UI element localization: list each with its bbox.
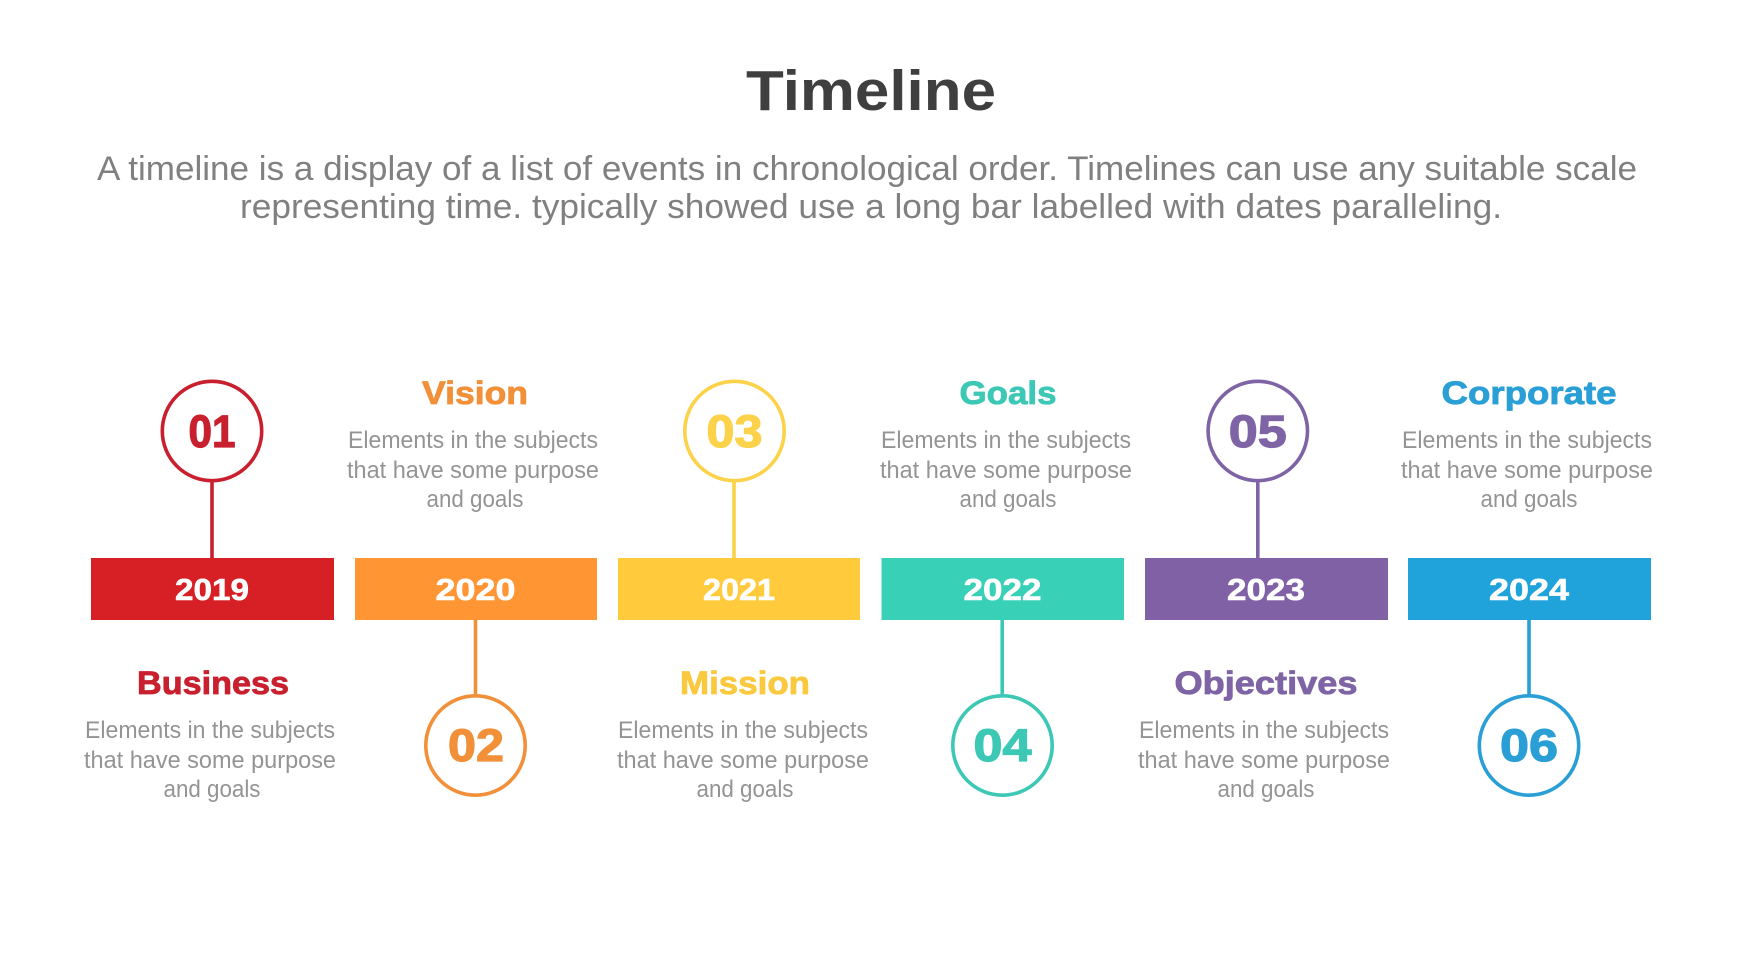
description 5: and goals bbox=[1218, 776, 1314, 803]
circle 06: 06 bbox=[1500, 720, 1558, 771]
title: Timeline bbox=[746, 59, 996, 123]
description 1: Elements in the subjects bbox=[85, 717, 335, 744]
description 4: and goals bbox=[960, 486, 1056, 513]
description 4 bbox=[880, 427, 1132, 513]
circle 05: 05 bbox=[1229, 406, 1287, 457]
heading Goals: Goals bbox=[960, 375, 1056, 411]
description 5 bbox=[1138, 717, 1390, 803]
description 2: that have some purpose bbox=[347, 457, 599, 484]
year bar 2022 bbox=[882, 558, 1124, 620]
description 6: and goals bbox=[1480, 486, 1578, 513]
description 6 bbox=[1401, 427, 1653, 513]
description 4: that have some purpose bbox=[880, 457, 1132, 484]
description 3: that have some purpose bbox=[617, 747, 869, 774]
description 1: that have some purpose bbox=[84, 747, 336, 774]
step 5: Objectives 2023 bbox=[1138, 381, 1390, 803]
year bar 2024 bbox=[1408, 558, 1651, 620]
year bar 2019 bbox=[91, 558, 334, 620]
year bar 2023: 2023 bbox=[1227, 572, 1305, 607]
circle 02 bbox=[426, 696, 525, 795]
year bar 2020 bbox=[355, 558, 597, 620]
connector 6 bbox=[1527, 618, 1531, 698]
description 2: Elements in the subjects bbox=[348, 427, 598, 454]
year bar 2022: 2022 bbox=[964, 572, 1042, 607]
description 1 bbox=[84, 717, 336, 803]
circle 03: 03 bbox=[706, 406, 762, 457]
subtitle text block: A timeline is a display of a list of events in chronological order. Timelines can use any suitable scale bbox=[97, 150, 1637, 188]
circle 01: 01 bbox=[188, 406, 236, 457]
heading Corporate: Corporate bbox=[1442, 375, 1616, 411]
circle 06 bbox=[1479, 696, 1579, 795]
description 3 bbox=[617, 717, 869, 803]
description 3: Elements in the subjects bbox=[618, 717, 868, 744]
year bar 2020: 2020 bbox=[436, 572, 516, 607]
connector 4 bbox=[1000, 618, 1004, 698]
heading Objectives: Objectives bbox=[1174, 665, 1358, 701]
heading Business: Business bbox=[137, 665, 289, 701]
step 1: Business 2019 bbox=[84, 381, 336, 803]
circle 01 bbox=[162, 381, 262, 481]
description 6: that have some purpose bbox=[1401, 457, 1653, 484]
connector 5 bbox=[1256, 480, 1260, 560]
description 2: and goals bbox=[426, 486, 524, 513]
circle 05 bbox=[1208, 381, 1308, 481]
year bar 2024: 2024 bbox=[1489, 572, 1570, 607]
circle 04: 04 bbox=[974, 720, 1032, 771]
year bar 2021: 2021 bbox=[703, 572, 775, 607]
connector 2 bbox=[474, 618, 477, 698]
year bar 2023 bbox=[1145, 558, 1388, 620]
year bar 2021 bbox=[618, 558, 860, 620]
subtitle text block bbox=[97, 150, 1637, 226]
step 2: Vision 2020 bbox=[347, 375, 599, 795]
circle 03 bbox=[685, 381, 784, 481]
heading Vision: Vision bbox=[422, 375, 528, 411]
heading Mission: Mission bbox=[680, 665, 810, 701]
description 3: and goals bbox=[696, 776, 794, 803]
step 6: Corporate 2024 bbox=[1401, 375, 1653, 795]
step 4: Goals 2022 bbox=[880, 375, 1132, 795]
step 3: Mission 2021 bbox=[617, 381, 869, 803]
connector 1 bbox=[210, 480, 214, 560]
circle 04 bbox=[953, 696, 1052, 795]
description 5: that have some purpose bbox=[1138, 747, 1390, 774]
description 1: and goals bbox=[164, 776, 260, 803]
description 4: Elements in the subjects bbox=[881, 427, 1131, 454]
connector 3 bbox=[732, 480, 736, 560]
circle 02: 02 bbox=[448, 720, 504, 771]
description 6: Elements in the subjects bbox=[1402, 427, 1652, 454]
year bar 2019: 2019 bbox=[175, 572, 249, 607]
description 5: Elements in the subjects bbox=[1139, 717, 1389, 744]
description 2 bbox=[347, 427, 599, 513]
subtitle text block: representing time. typically showed use a long bar labelled with dates paralleling. bbox=[240, 188, 1502, 226]
